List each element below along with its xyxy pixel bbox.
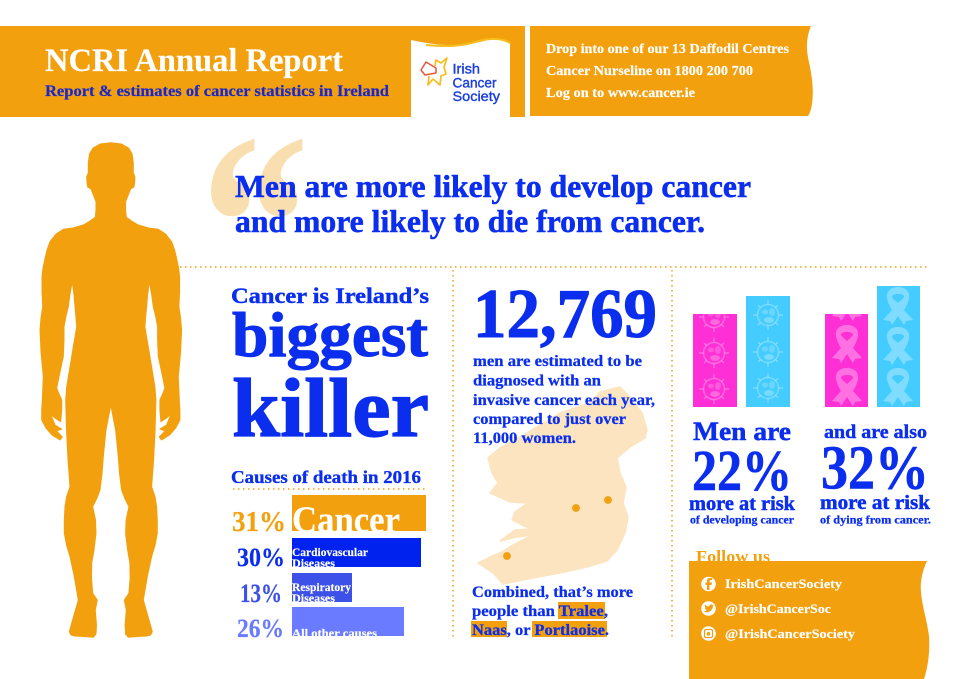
contact banner [530,26,813,116]
callout: combined towns: Naas, or Portlaoise. [472,622,609,639]
statistic: men 32% more at risk: of dying from cancer. [820,514,931,526]
icon: twitter [701,601,716,616]
map: Ireland with town markers [478,387,647,584]
headline quote [235,168,751,239]
pictogram: risk of dying from cancer [825,283,920,407]
logo: Irish Cancer Society: Irish [452,60,480,76]
statistic: 12,769 men: men are estimated to be [473,353,642,370]
panel: social media: @IrishCancerSociety [725,626,856,641]
header banner: report title [0,26,525,117]
contact banner: Cancer Nurseline on 1800 200 700 [546,63,753,78]
panel: biggest killer: killer [232,362,429,455]
logo: Irish Cancer Society [411,39,510,117]
statistic: men 22% more at risk: Men are [693,416,791,446]
statistic: men 32% more at risk: more at risk [820,492,931,514]
statistic: men 22% more at risk: more at risk [689,493,796,515]
subtitle: Report & estimates of cancer statistics in Ireland [45,83,389,100]
callout: combined towns: people than Tralee, [472,603,608,620]
statistic: 12,769 men: 11,000 women. [473,430,576,447]
marker: Portlaoise [572,504,580,512]
bar chart: causes of death in 2016 [231,467,426,643]
statistic: men 32% more at risk [820,423,931,526]
heading: follow us: Follow us [696,547,770,566]
callout: combined towns: Combined, that’s more [472,584,633,601]
pictogram: risk of developing cancer [693,296,790,407]
title: NCRI Annual Report [45,43,343,79]
contact banner: Drop into one of our 13 Daffodil Centres [546,41,789,56]
contact banner: Log on to www.cancer.ie [546,85,695,100]
icon: male body silhouette [40,143,182,637]
headline quote: and more likely to die from cancer. [235,203,705,239]
bar: all other causes 26% [237,607,404,643]
bar: cardiovascular diseases 30%: 30% [237,543,285,572]
panel: social media [689,561,929,679]
bar: respiratory diseases 13%: 13% [240,579,282,608]
bar: cancer 31%: 31% [232,507,286,538]
bar: cancer 31% [232,495,426,532]
statistic: men 22% more at risk: 22% [692,438,792,503]
panel: biggest killer [231,283,429,455]
icon: instagram [701,626,716,641]
panel: biggest killer: biggest [232,299,429,370]
panel: social media: @IrishCancerSoc [725,601,831,616]
headline quote: Men are more likely to develop cancer [235,168,751,204]
panel: social media: IrishCancerSociety [725,576,843,591]
logo: Irish Cancer Society: Society [452,88,500,104]
statistic: men 22% more at risk [689,416,796,526]
bar: all other causes 26%: 26% [237,614,284,643]
marker: Naas [604,496,612,504]
bar: all other causes 26%: All other causes [292,628,378,640]
bar: cardiovascular diseases 30%: Cardiovascular [292,547,368,559]
statistic: men 32% more at risk: and are also [824,423,927,443]
bar: respiratory diseases 13%: Diseases [292,593,336,605]
statistic: men 22% more at risk: of developing cancer [690,514,794,526]
statistic: 12,769 men: invasive cancer each year, [473,392,655,409]
callout: combined towns [471,584,633,639]
bar: cardiovascular diseases 30% [237,538,421,572]
statistic: 12,769 men [473,276,657,447]
bar: cardiovascular diseases 30%: Diseases [292,558,336,570]
bar: respiratory diseases 13% [240,573,352,608]
statistic: men 32% more at risk: 32% [821,434,929,502]
marker: Tralee [503,552,511,560]
panel: biggest killer: Cancer is Ireland’s [231,283,429,308]
bar: respiratory diseases 13%: Respiratory [292,582,351,594]
chart heading: Causes of death in 2016 [231,467,421,487]
icon: quotation mark: “ [200,82,310,365]
statistic: 12,769 men: 12,769 [473,276,657,353]
statistic: 12,769 men: diagnosed with an [473,372,601,390]
logo: Irish Cancer Society: Cancer [452,74,497,90]
bar: cancer 31%: Cancer [292,500,400,541]
icon: facebook [701,577,716,591]
statistic: 12,769 men: compared to just over [473,411,626,428]
